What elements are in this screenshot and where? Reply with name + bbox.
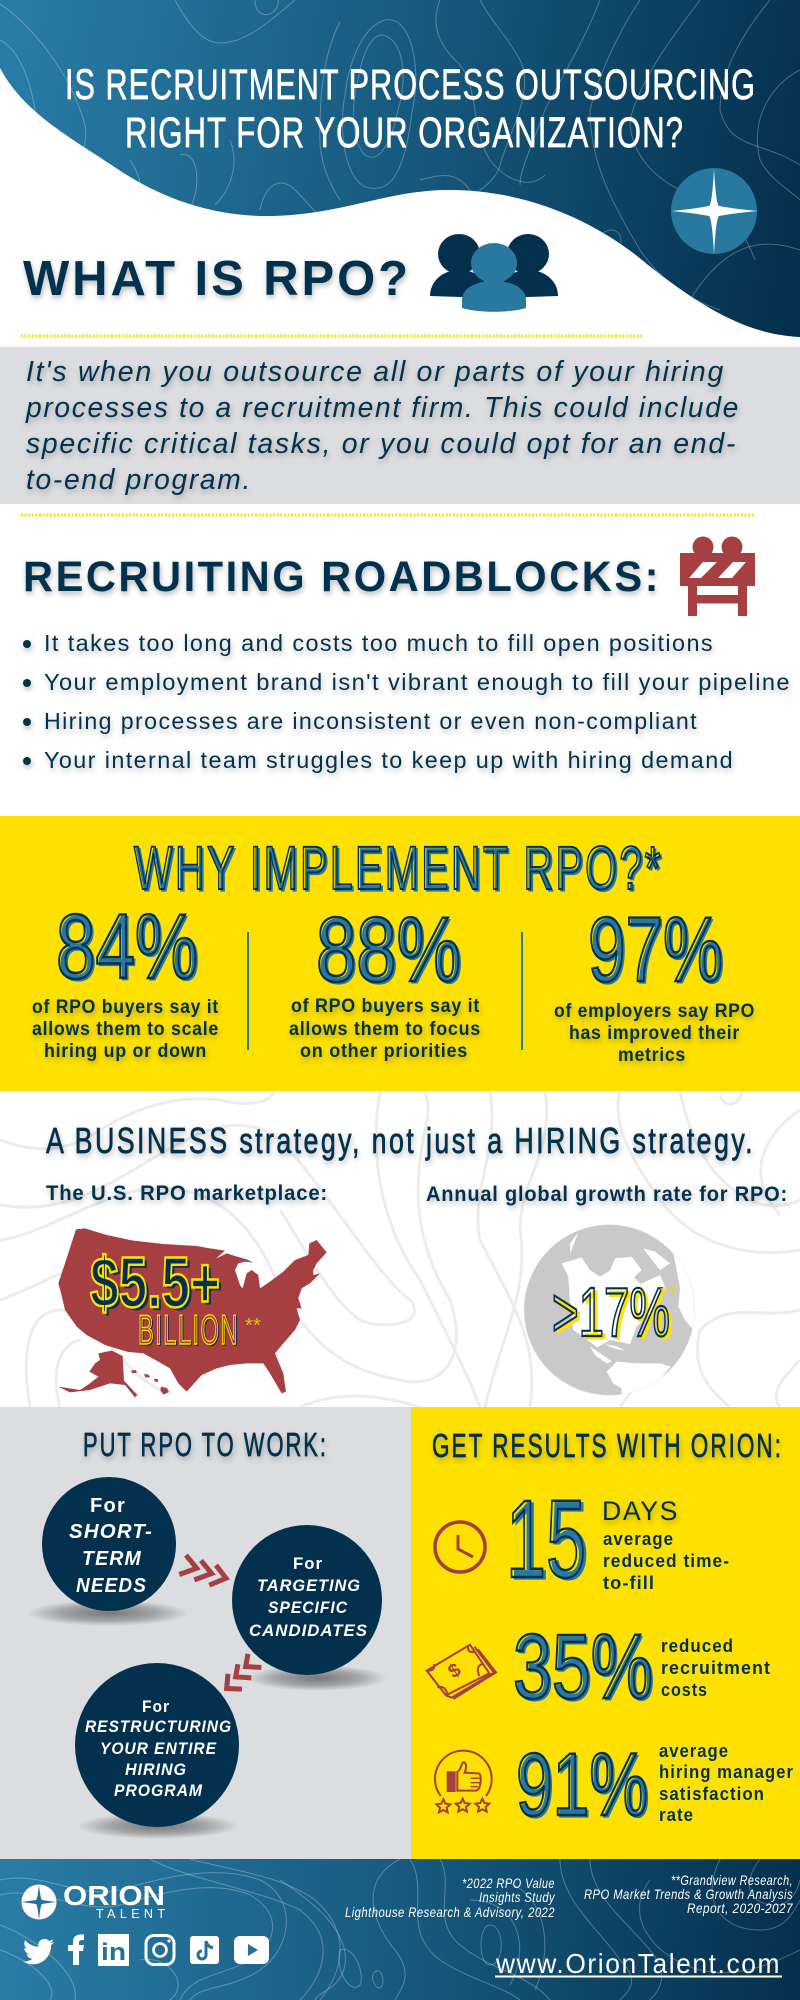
stat: 88%: 88%	[316, 899, 461, 1001]
caption: focus on priorities: allows them to focus	[289, 1019, 481, 1040]
stat: 35%: 35%	[515, 1618, 655, 1720]
list: roadblocks: Your internal team struggles to keep up with hiring demand	[44, 747, 734, 773]
stat: $5.5+: $5.5+	[90, 1244, 220, 1323]
stat: 97%: 97%	[590, 901, 725, 1003]
circle: restructuring entire hiring program	[75, 1663, 239, 1827]
heading: what is RPO: WHAT IS RPO?	[23, 252, 411, 306]
icon: group of people	[430, 234, 558, 312]
footnote: lighthouse research	[345, 1875, 555, 1920]
caption: scale hiring: allows them to scale	[32, 1019, 219, 1040]
circle: targeting specific candidates	[232, 1525, 382, 1675]
stat: 15 days: DAYS	[602, 1496, 679, 1526]
stat: billion: BILLION	[139, 1307, 240, 1354]
stat: 35%	[513, 1616, 771, 1720]
stat: 35%: 35%	[513, 1616, 653, 1718]
caption: scale hiring	[32, 997, 219, 1062]
caption: scale hiring: hiring up or down	[44, 1041, 207, 1062]
caption: improved metrics: has improved their	[569, 1023, 740, 1044]
circle: short-term needs	[42, 1477, 176, 1611]
header wave banner	[0, 0, 800, 337]
chart: globe with growth rate	[524, 1225, 697, 1397]
stat: 91%: rate	[659, 1805, 694, 1825]
arrow: targeting to restructuring	[227, 1654, 261, 1689]
definition text: It's when you outsource all or parts of your hiring	[26, 356, 725, 388]
definition text	[25, 356, 740, 496]
stat: 91%: 91%	[518, 1736, 650, 1836]
heading: put RPO to work: PUT RPO TO WORK:	[83, 1426, 328, 1463]
circle: restructuring entire hiring program: RESTRUCTURING	[85, 1718, 232, 1736]
circle: targeting specific candidates: SPECIFIC	[268, 1598, 348, 1617]
circle: restructuring entire hiring program: PROGRAM	[114, 1782, 203, 1800]
logo: Orion Talent: ORION	[63, 1880, 165, 1911]
panel: put RPO to work	[0, 1407, 411, 1859]
caption: improved metrics	[554, 1001, 755, 1066]
stat: 35%: reduced	[661, 1636, 734, 1656]
icon: thumbs up rating	[435, 1751, 492, 1812]
stat: 15 days	[506, 1478, 730, 1603]
stat: 35%: costs	[661, 1680, 708, 1700]
circle: short-term needs: SHORT-	[69, 1521, 153, 1543]
icon: youtube	[234, 1936, 269, 1964]
stat: 91%: 91%	[516, 1734, 648, 1834]
icon: instagram	[146, 1936, 174, 1964]
stat: $5.5+: $5.5+	[93, 1247, 223, 1326]
website link: www.OrionTalent.com	[495, 1948, 781, 1979]
stat: >17%: >17%	[555, 1276, 673, 1354]
circle: short-term needs: For	[90, 1495, 126, 1517]
footnote mark: **	[245, 1315, 261, 1337]
stat: 15 days: reduced time-	[603, 1551, 730, 1571]
stat: 91%	[516, 1734, 794, 1836]
stat: 97%: 97%	[588, 899, 723, 1001]
caption: focus on priorities: on other priorities	[300, 1041, 468, 1062]
icon: money stack: $	[445, 1659, 465, 1683]
footer band	[0, 1859, 800, 2000]
panel: get results with Orion	[411, 1407, 800, 1859]
stat: billion: BILLION	[138, 1306, 239, 1353]
arrow: short-term to targeting	[179, 1555, 226, 1585]
definition text: specific critical tasks, or you could opt for an end-	[26, 428, 737, 460]
chart: US map with market size	[58, 1228, 327, 1397]
stat: billion	[138, 1306, 240, 1354]
social icons	[23, 1934, 269, 1966]
icon: compass star badge	[671, 168, 758, 254]
stat: 91%: average	[659, 1741, 729, 1761]
caption: focus on priorities	[289, 996, 481, 1062]
stat: 15 days: average	[603, 1529, 674, 1549]
stat: 91%: satisfaction	[659, 1784, 765, 1804]
definition text: processes to a recruitment firm. This could include	[25, 392, 740, 424]
circle: short-term needs: NEEDS	[76, 1575, 147, 1597]
stat: 15 days: 15	[506, 1478, 586, 1601]
list: roadblocks: Your employment brand isn't vibrant enough to fill your pipeline	[44, 669, 791, 695]
footnote: lighthouse research: Lighthouse Research & Advisory, 2022	[345, 1904, 555, 1920]
logo: Orion Talent: TALENT	[96, 1907, 165, 1921]
stat: 84%: 84%	[56, 896, 198, 998]
caption: improved metrics: metrics	[618, 1045, 686, 1066]
stat: 35%: recruitment	[661, 1658, 771, 1678]
icon: tiktok	[190, 1936, 219, 1964]
stat: 15 days: 15	[509, 1480, 589, 1603]
footnote: lighthouse research: Insights Study	[479, 1889, 555, 1905]
icon: money stack	[427, 1645, 496, 1699]
stat: >17%: >17%	[552, 1273, 670, 1351]
circle: restructuring entire hiring program: YOUR ENTIRE	[100, 1740, 217, 1758]
shadows under circles	[27, 1600, 387, 1839]
caption: improved metrics: of employers say RPO	[554, 1001, 755, 1022]
icon: road barrier	[680, 536, 755, 616]
icon: twitter	[23, 1939, 54, 1964]
list: roadblocks: It takes too long and costs too much to fill open positions	[44, 630, 714, 656]
label: U.S. marketplace: The U.S. RPO marketplace:	[46, 1182, 328, 1205]
definition text: to-end program.	[26, 464, 252, 496]
panel: why implement RPO	[0, 816, 800, 1091]
circle: targeting specific candidates: CANDIDATES	[249, 1621, 368, 1640]
panel: RPO definition	[0, 347, 800, 504]
footnote: grandview research	[584, 1872, 794, 1916]
title	[65, 61, 756, 157]
icon: linkedin	[98, 1934, 129, 1966]
stat: 88%: 88%	[318, 901, 463, 1003]
stat: 84%: 84%	[58, 898, 200, 1000]
stat: 91%: hiring manager	[659, 1762, 794, 1782]
label: global growth rate: Annual global growth rate for RPO:	[426, 1183, 788, 1206]
circle: short-term needs: TERM	[82, 1548, 142, 1570]
circle: targeting specific candidates: TARGETING	[257, 1576, 361, 1595]
footnote: lighthouse research: *2022 RPO Value	[462, 1875, 555, 1891]
icon: linkedin: in	[101, 1939, 126, 1966]
caption: scale hiring: of RPO buyers say it	[32, 997, 219, 1018]
icon: clock	[435, 1522, 485, 1572]
circle: restructuring entire hiring program: HIRING	[125, 1761, 187, 1779]
list: roadblocks: Hiring processes are inconsistent or even non-compliant	[44, 708, 698, 734]
logo: Orion Talent	[21, 1880, 165, 1921]
circle: restructuring entire hiring program: For	[142, 1698, 170, 1716]
icon: facebook	[68, 1934, 84, 1965]
footnote mark: **	[660, 1283, 676, 1305]
list: roadblocks	[23, 630, 791, 773]
circle: targeting specific candidates: For	[293, 1554, 323, 1573]
caption: focus on priorities: of RPO buyers say it	[291, 996, 480, 1017]
heading: recruiting roadblocks: RECRUITING ROADBLOCKS:	[23, 553, 661, 601]
stat: >17%	[552, 1273, 673, 1354]
stat: 15 days: to-fill	[603, 1573, 655, 1593]
